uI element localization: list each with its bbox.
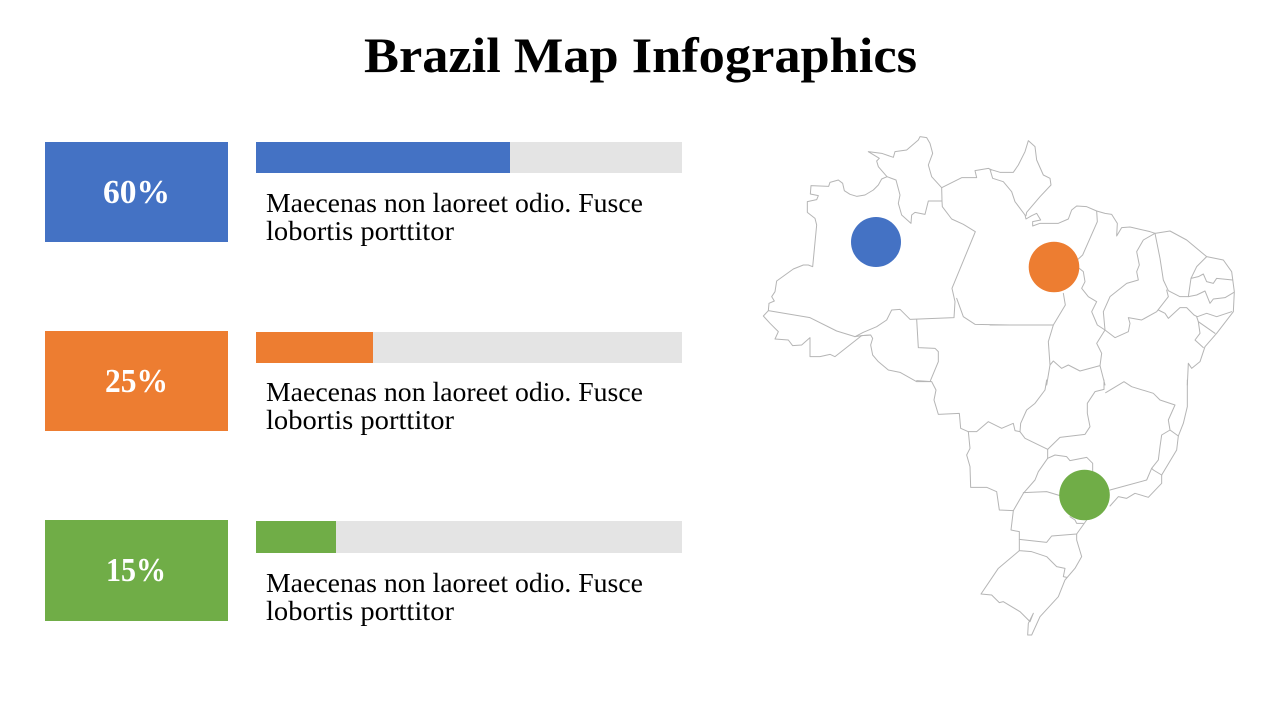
map of Brazil [763,137,1234,635]
progress bar: 25% [256,332,682,363]
percentage box: 25% [45,331,228,431]
percentage box: 25%: 25% [105,363,168,400]
progress bar: 15% [256,521,682,553]
text block: row 1: lobortis porttitor [266,216,454,246]
percentage box: 60% [45,142,228,242]
map marker: green [1059,470,1110,520]
percentage box: 15% [45,520,228,621]
percentage box: 15%: 15% [106,552,166,589]
text block: row 3 [266,568,643,626]
row: 25% [45,331,682,435]
map marker: orange [1029,242,1079,292]
text block: row 3: lobortis porttitor [266,596,454,626]
map marker: blue [851,217,901,267]
text block: row 1: Maecenas non laoreet odio. Fusce [266,188,643,218]
text block: row 2: Maecenas non laoreet odio. Fusce [266,377,643,407]
text block: row 3: Maecenas non laoreet odio. Fusce [266,568,643,598]
percentage box: 60%: 60% [103,174,170,211]
text block: row 1 [266,188,643,246]
progress bar: 60% [256,142,682,173]
row: 60% [45,142,682,246]
title: Brazil Map Infographics [364,27,917,83]
text block: row 2: lobortis porttitor [266,405,454,435]
text block: row 2 [266,377,643,435]
row: 15% [45,520,682,626]
